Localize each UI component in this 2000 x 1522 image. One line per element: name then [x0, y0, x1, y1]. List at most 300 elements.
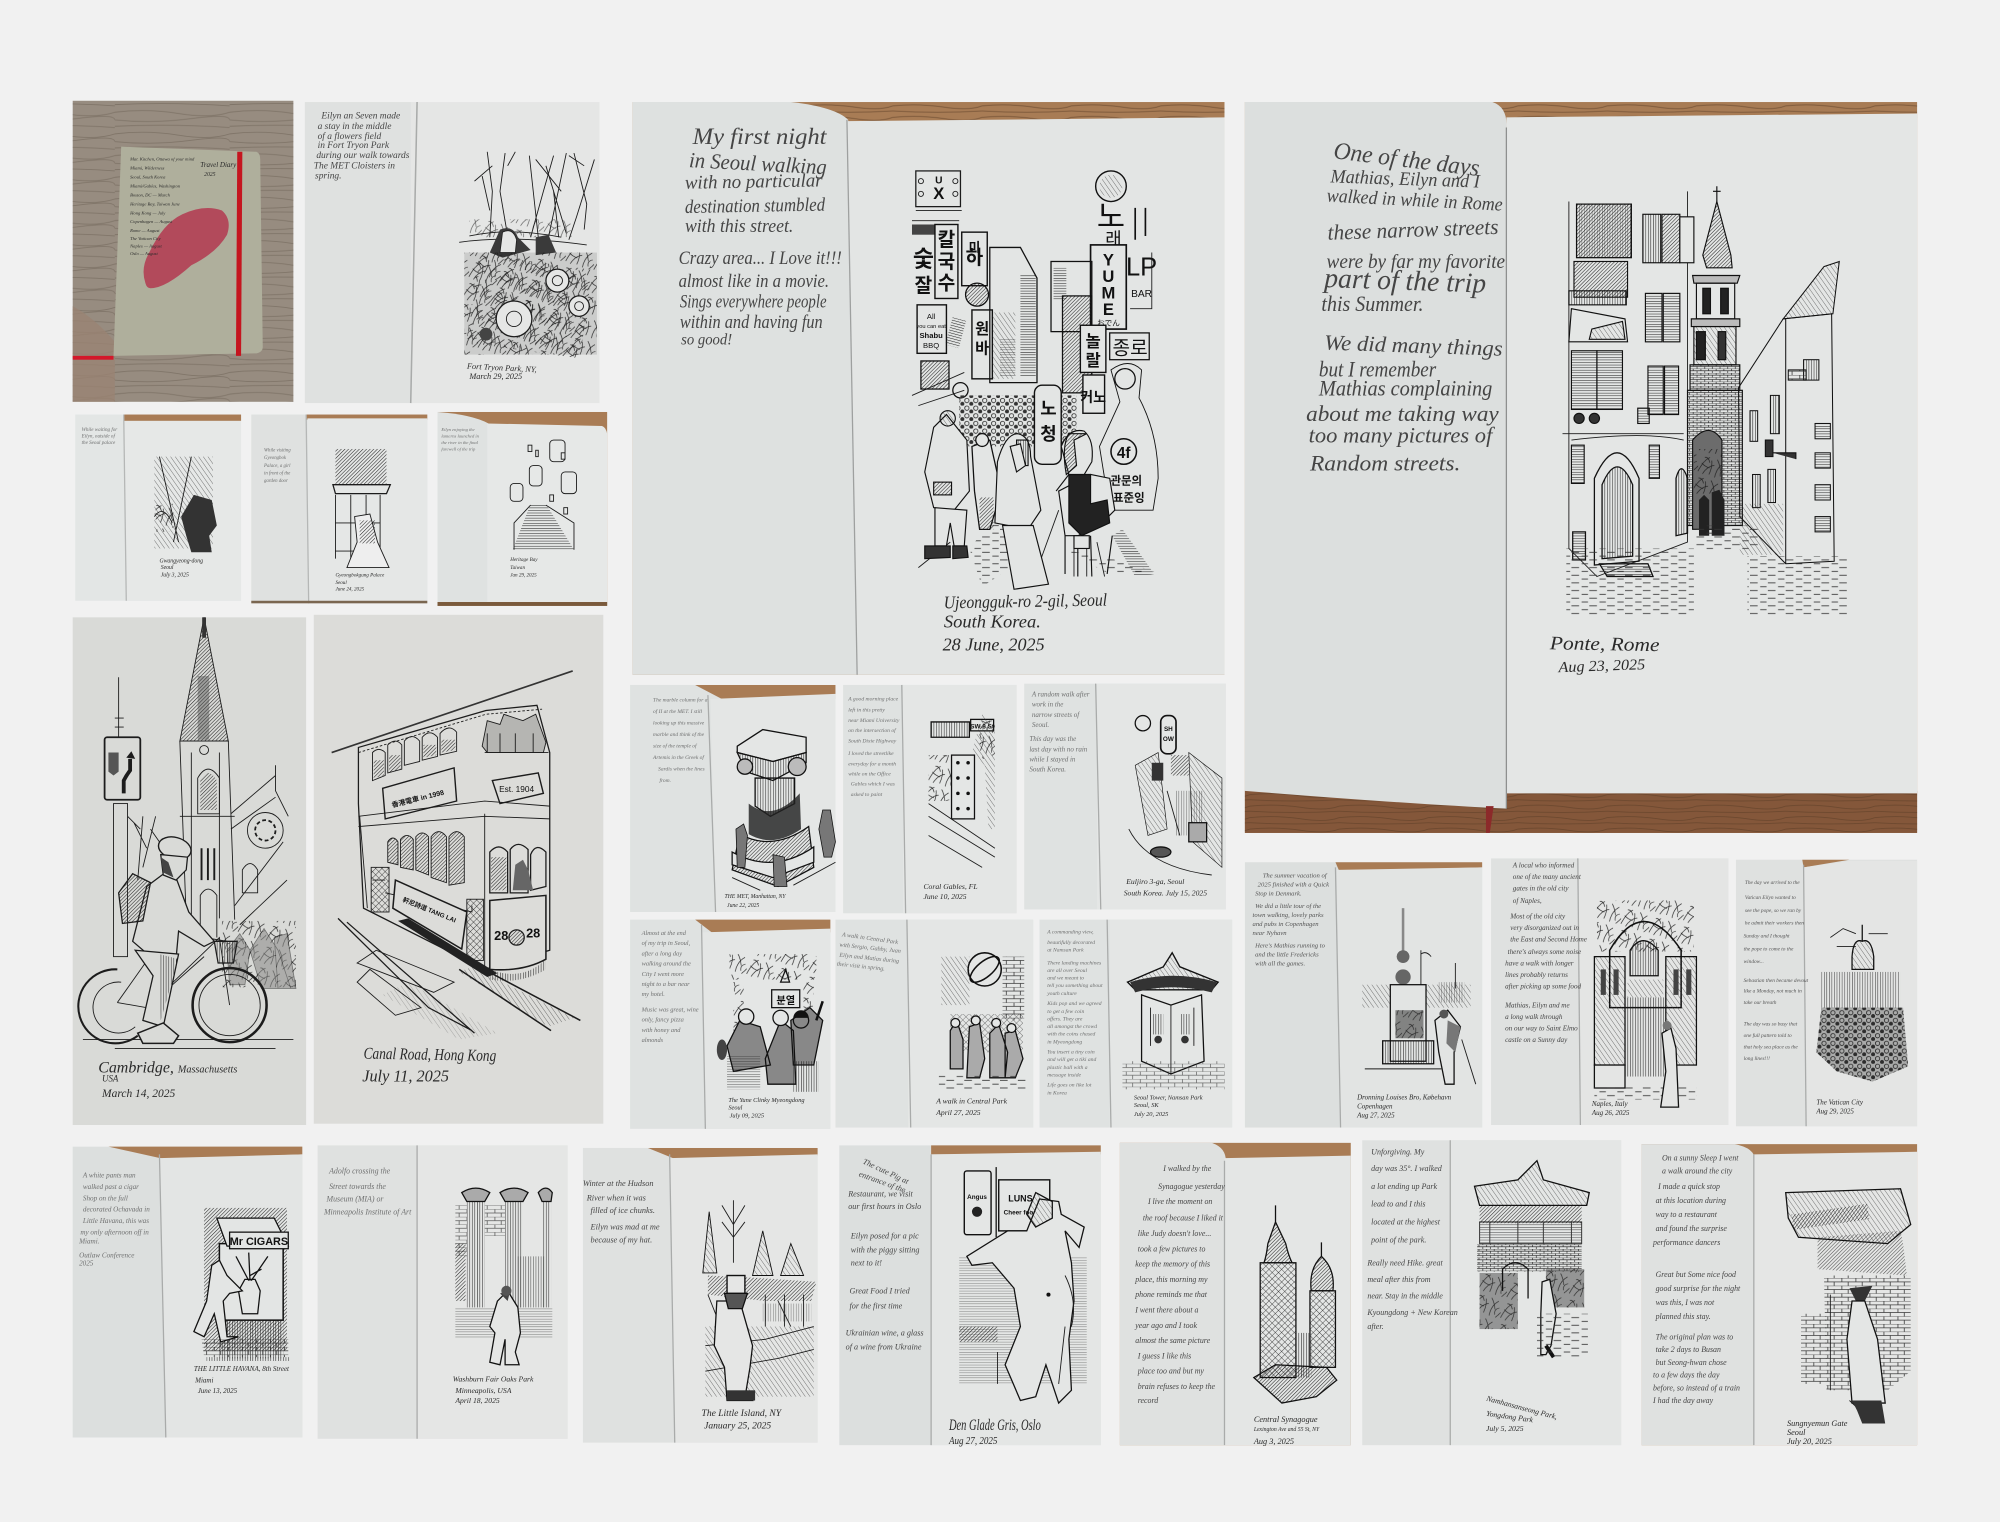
caption	[509, 557, 538, 579]
note: work in the	[1032, 701, 1063, 709]
caption: Gwangyeong-dong	[159, 558, 203, 564]
sketch: left shop signs: 원	[975, 321, 989, 338]
sketch: steps	[455, 1307, 552, 1338]
note: while I stayed in	[1029, 755, 1076, 763]
sketch: minarets	[1264, 1205, 1292, 1263]
sketch: left shop signs: 국	[938, 252, 955, 273]
panel: Coral Gables spread	[843, 685, 1017, 913]
caption: Aug 27, 2025	[948, 1436, 997, 1447]
note: town walking, lovely parks	[1253, 912, 1324, 919]
cover handwriting list: Naples — August	[129, 243, 163, 248]
sketch: UX sign tower: U	[935, 176, 942, 187]
sketch: stone wall	[1477, 1244, 1582, 1272]
note: Seoul.	[1032, 721, 1049, 729]
note: in Seoul walking	[689, 148, 827, 179]
note: South Korea.	[1029, 766, 1066, 774]
sketch: palm tree	[972, 714, 995, 829]
sketch: cyclist	[119, 833, 214, 1043]
caption	[194, 1365, 290, 1395]
sketch: soju bottle: 4f	[1117, 445, 1131, 462]
caption	[453, 1374, 534, 1405]
sketch: left shop signs: 수	[938, 273, 955, 295]
sketch: UX sign tower	[912, 171, 962, 235]
note: entrance of the	[858, 1169, 907, 1195]
sketch: upper side sign	[383, 768, 457, 819]
note: Minneapolis Institute of Art	[323, 1207, 412, 1216]
note: size of the temple of	[653, 742, 698, 749]
red elastic strap	[236, 152, 242, 356]
caption: Fort Tryon Park, NY,	[466, 362, 537, 374]
note	[652, 697, 708, 784]
sketch: lower deck arches	[388, 832, 464, 885]
note: plastic ball with a	[1046, 1065, 1088, 1071]
note: The day we arrived to the	[1745, 880, 1800, 886]
caption	[1356, 1093, 1452, 1119]
note: place, this morning my	[1134, 1275, 1208, 1284]
cover handwriting list	[129, 157, 237, 256]
note: keep the memory of this	[1135, 1260, 1210, 1269]
panel: MET Ionic column spread	[630, 685, 835, 912]
caption: The Vatican City	[1816, 1099, 1864, 1107]
sketch: bell tower	[1687, 186, 1742, 529]
note: of a flowers field	[318, 131, 381, 142]
panel: Central Synagogue spread	[1120, 1143, 1351, 1446]
note: Here's Mathias running to	[1254, 943, 1326, 950]
note: and pubs in Copenhagen	[1253, 921, 1319, 928]
note: Artemis in the Greek of	[652, 754, 705, 761]
note: gates in the old city	[1513, 884, 1569, 892]
cover handwriting list: Hong Kong — July	[129, 210, 166, 215]
note	[263, 449, 291, 484]
caption	[98, 1060, 237, 1100]
caption: A walk in Central Park	[935, 1096, 1008, 1105]
panel: Copenhagen lion monument spread	[1245, 862, 1482, 1128]
sketch: band stage	[730, 954, 816, 980]
note: Restaurant, we visit	[847, 1189, 914, 1198]
caption: March 29, 2025	[468, 372, 522, 381]
note: A white pants man	[82, 1171, 136, 1179]
note: I loved the streetlike	[847, 751, 894, 757]
note: Ukrainian wine, a glass	[846, 1328, 924, 1337]
note: these narrow streets	[1327, 215, 1499, 245]
note: at Namsan Park	[1047, 948, 1084, 954]
note: Music was great, wine	[641, 1006, 699, 1013]
note: Shop on the full	[83, 1194, 128, 1202]
note: While waiting for	[82, 426, 117, 433]
note	[847, 696, 900, 798]
sketch: soju bottle: 관문의	[1110, 474, 1142, 488]
note: and will get a tiki and	[1047, 1057, 1096, 1063]
note: Outlaw Conference	[79, 1252, 134, 1260]
sketch: crowd	[959, 395, 1077, 446]
sketch: right building and roof	[1739, 261, 1839, 564]
note: destination stumbled	[685, 195, 826, 218]
note: to a few days the day	[1653, 1371, 1720, 1380]
caption	[935, 1096, 1008, 1117]
panel: Hong Kong tram: 28	[494, 928, 508, 943]
caption	[466, 362, 537, 381]
sketch: crowd	[222, 921, 296, 987]
sketch: upper front sign	[492, 773, 543, 804]
note: almost like in a movie.	[679, 271, 829, 292]
sketch: fluted shaft and dark drum	[755, 778, 795, 816]
caption: The Yune Clinky Myeongdong	[728, 1097, 805, 1104]
note: I went there about a	[1134, 1305, 1199, 1314]
cover handwriting list: Boston, DC — March	[130, 192, 171, 198]
note: there's always some noise	[1508, 948, 1581, 956]
note: after picking up some food	[1505, 983, 1582, 991]
note: one full pattern told to	[1744, 1032, 1792, 1039]
note: take 2 days to Busan	[1656, 1345, 1721, 1354]
note: year ago and I took	[1134, 1321, 1197, 1330]
note: Street towards the	[329, 1182, 386, 1191]
sketch: awning	[217, 1218, 288, 1246]
note: farewell of the trip	[441, 446, 476, 451]
panel: Namsan park gate spread	[1362, 1140, 1621, 1445]
caption: Central Synagogue	[1254, 1415, 1318, 1424]
sketch: YUME sign: Y	[1103, 250, 1114, 269]
sketch: traffic lights and sign	[931, 722, 969, 737]
sketch: harbour buildings	[1362, 985, 1471, 1008]
sketch: right side signs	[1051, 253, 1157, 413]
sketch: alley	[1135, 753, 1222, 867]
note: A good morning place	[847, 696, 899, 702]
note: Museum (MIA) or	[326, 1195, 384, 1204]
note: There landing machines	[1047, 960, 1102, 966]
sketch: long-haired girl	[995, 434, 1048, 589]
note: My first night	[692, 124, 827, 149]
note: On a sunny Sleep I went	[1662, 1154, 1739, 1163]
note: castle on a Sunny day	[1505, 1036, 1568, 1044]
note: like a Monday, not much in	[1744, 988, 1802, 994]
sketch: bicycle	[78, 937, 293, 1048]
panel: Vatican City spread	[1736, 860, 1917, 1126]
note: Gables which I was	[851, 782, 896, 788]
note: 2025	[79, 1259, 94, 1267]
note: all amongst the crowd	[1047, 1024, 1097, 1030]
panel: Hong Kong tram: 28	[526, 925, 540, 940]
note: walked in while in Rome	[1326, 186, 1504, 216]
caption	[1124, 877, 1207, 897]
sketch: man from behind	[925, 411, 969, 559]
caption: June 22, 2025	[727, 903, 759, 909]
note: Sings everywhere people	[680, 291, 827, 312]
note: take our breath	[1744, 1000, 1777, 1006]
sketch: courtyard plant and figures	[1694, 449, 1722, 494]
note: Vatican Eilyn wanted to	[1745, 895, 1796, 901]
caption: April 18, 2025	[454, 1396, 500, 1405]
panel: Eulji-ro alley spread	[1024, 684, 1226, 909]
note: very disorganized out in	[1510, 924, 1579, 932]
note: Eilyn and Matias during	[838, 953, 899, 965]
caption	[1484, 1393, 1558, 1433]
sketch: passengers on the top deck	[482, 714, 546, 753]
sketch: gate roof	[1786, 1189, 1911, 1244]
note: River when it was	[586, 1193, 646, 1202]
caption	[1591, 1100, 1630, 1117]
caption: Aug 26, 2025	[1591, 1109, 1630, 1117]
note: see the pope, so we ran by	[1745, 908, 1802, 914]
sketch: left shop signs: 바	[975, 340, 989, 357]
caption: Aug 27, 2025	[1356, 1111, 1395, 1119]
note: our first hours in Oslo	[848, 1202, 921, 1211]
sketch: walking group	[950, 1020, 1023, 1078]
note: Most of the old city	[1509, 912, 1566, 920]
note: offers. They are	[1047, 1015, 1083, 1022]
panel: Fort Tryon Park spread	[305, 102, 599, 403]
note	[1366, 1147, 1458, 1331]
note: Eilyn was mad at me	[590, 1223, 660, 1232]
sketch: storefront	[204, 1208, 287, 1351]
panel: Eulji-ro alley spread: OW	[1163, 736, 1174, 743]
note: We did a little tour of the	[1255, 903, 1321, 910]
note: after a long day	[642, 950, 682, 957]
caption: Seoul, SK	[1134, 1102, 1159, 1109]
caption: Aug 29, 2025	[1815, 1108, 1854, 1116]
panel: Sungnyemun gate spread	[1642, 1144, 1917, 1446]
sketch: main building outline	[1569, 191, 1687, 577]
note	[1134, 1164, 1225, 1405]
caption: Seoul Tower, Namsan Park	[1134, 1094, 1203, 1101]
panel: Seoul street spread	[633, 102, 1224, 675]
note: were by far my favorite	[1327, 251, 1505, 273]
sketch: domino building	[952, 755, 974, 819]
note: walking around the	[642, 961, 691, 968]
caption: Den Glade Gris, Oslo	[948, 1417, 1041, 1434]
note: too many pictures of	[1309, 424, 1495, 448]
caption: Copenhagen	[1357, 1102, 1393, 1110]
note: Sunday and I thought	[1744, 933, 1790, 939]
note: one of the many ancient	[1513, 873, 1582, 881]
note: about me taking way	[1306, 402, 1499, 426]
caption: Aug 3, 2025	[1253, 1437, 1294, 1446]
sketch: window vase and plant	[239, 1279, 260, 1314]
note: within and having fun	[680, 312, 823, 333]
sketch: tracks and road	[338, 918, 580, 1033]
caption	[923, 882, 978, 901]
note: I guess I like this	[1137, 1351, 1191, 1360]
sketch: pedestrian	[1661, 1028, 1679, 1107]
sketch: columns	[467, 1199, 485, 1307]
sketch: cobbled street	[1566, 548, 1694, 615]
note: in Fort Tryon Park	[318, 141, 390, 151]
caption	[159, 558, 203, 579]
note: Eilyn posed for a pic	[850, 1232, 919, 1241]
sketch: right side signs: BAR	[1131, 289, 1152, 300]
panel: Den Glade Gris Oslo spread: LUNS	[1008, 1194, 1033, 1204]
sketch: right side signs: 랄	[1085, 351, 1101, 370]
note: the river in the final	[441, 440, 479, 445]
note: South Dixie Highway	[848, 738, 897, 744]
note: performance dancers	[1652, 1238, 1720, 1247]
sketch: pavement	[969, 510, 1154, 587]
note: on our way to Saint Elmo	[1505, 1025, 1578, 1033]
cover handwriting list: Travel Diary	[200, 161, 237, 169]
note: before, so instead of a train	[1653, 1383, 1740, 1392]
note: night to a bar near	[642, 981, 690, 988]
note: on the intersection of	[848, 727, 897, 734]
caption: South Korea.	[944, 612, 1041, 632]
sketch: centre building	[990, 247, 1037, 383]
caption: Gyeongbokgung Palace	[335, 573, 385, 579]
caption: June 24, 2025	[335, 587, 365, 593]
note: Eilyn enjoying the	[440, 427, 475, 432]
note	[1029, 690, 1090, 774]
sketch: daffodil bed	[464, 253, 597, 355]
caption: The Little Island, NY	[702, 1408, 783, 1419]
note: with Sergio, Gabby, Juan	[839, 942, 901, 955]
note	[1652, 1154, 1741, 1405]
note: meal after this from	[1367, 1275, 1431, 1284]
note: from.	[659, 777, 671, 784]
cover handwriting list: Oslo — August	[130, 251, 158, 256]
sketch: overhead wire	[332, 671, 573, 753]
note: The summer vacation of	[1263, 873, 1328, 880]
sketch: left shop signs: 칼	[938, 229, 956, 251]
caption: Sungnyemun Gate	[1787, 1419, 1848, 1428]
caption: April 27, 2025	[935, 1108, 981, 1117]
note: this Summer.	[1321, 292, 1423, 316]
sketch: 노청 sign: 청	[1040, 424, 1057, 444]
caption: July 11, 2025	[362, 1067, 449, 1086]
sketch: left shop signs	[912, 224, 992, 406]
sketch: upper windows with shutters	[1569, 204, 1694, 483]
note	[440, 427, 480, 451]
panel: Seoul tower kiosk spread	[1040, 920, 1232, 1128]
note: with the coins chased	[1047, 1032, 1096, 1038]
sketch: trees	[459, 152, 594, 245]
note: with no particular	[685, 170, 823, 194]
note	[641, 930, 699, 1044]
caption: Cambridge, Massachusetts	[98, 1060, 237, 1077]
sketch: guard with hat and spear	[1849, 1286, 1872, 1301]
note: Little Havana, this was	[82, 1217, 149, 1225]
caption: March 14, 2025	[101, 1088, 175, 1100]
caption: Canal Road, Hong Kong	[363, 1044, 496, 1065]
note: during our walk towards	[316, 151, 410, 161]
note: with honey and	[642, 1027, 681, 1034]
note	[583, 1179, 660, 1244]
caption	[362, 1044, 496, 1086]
note: near Miami University	[848, 718, 900, 724]
cover handwriting list: 2025	[204, 172, 216, 178]
note: Almost at the end	[641, 930, 687, 937]
note: of Naples,	[1513, 897, 1542, 905]
sketch: lanterns	[510, 440, 577, 514]
panel: Central Park walk spread	[835, 920, 1033, 1128]
sketch: neon music bar sign	[1096, 171, 1145, 249]
panel: Naples gate spread	[1491, 858, 1728, 1125]
panel: Hong Kong tram: Est. 1904	[499, 784, 534, 794]
sketch: church spire	[180, 617, 228, 741]
caption: Jan 29, 2025	[510, 573, 537, 579]
note: Sardis when the lines	[658, 766, 705, 772]
note	[78, 1171, 150, 1267]
note: Really need Hike. great	[1366, 1258, 1443, 1267]
note: to get a few coin	[1047, 1008, 1084, 1015]
note: he admit their workers then	[1745, 921, 1804, 927]
sketch: soju bottle	[1099, 364, 1158, 510]
panel: Heritage Bay lanterns spread	[438, 412, 607, 606]
sketch: woman with crossed arms	[1056, 430, 1115, 577]
sketch: right side signs: 커노	[1080, 389, 1106, 405]
caption: Dronning Louises Bro, Købehavn	[1356, 1093, 1452, 1101]
caption: Seoul	[161, 565, 174, 571]
panel: Yeon Clinic band spread: 분열	[776, 994, 795, 1007]
sketch: soju bottle: 표준잉	[1113, 491, 1145, 504]
caption: June 10, 2025	[923, 892, 967, 901]
note	[81, 426, 117, 446]
caption: January 25, 2025	[704, 1421, 771, 1432]
note: day was 35°. I walked	[1371, 1164, 1443, 1173]
cover handwriting list: Heritage Bay, Taiwan June	[129, 201, 180, 207]
sketch: tram roof and upper deck	[358, 705, 550, 969]
note	[314, 112, 410, 182]
cover handwriting list: Seoul, South Korea	[130, 175, 166, 181]
caption: Namhansanseong Park,	[1484, 1393, 1558, 1421]
note: are all over Seoul	[1047, 968, 1087, 974]
caption: Washburn Fair Oaks Park	[453, 1374, 534, 1383]
note: The original plan was to	[1656, 1332, 1733, 1341]
note: but I remember	[1319, 357, 1437, 381]
note: after.	[1367, 1322, 1384, 1331]
note: of a wine from Ukraine	[846, 1342, 922, 1351]
sketch: left shop signs: you can eat	[916, 324, 946, 330]
note: the roof because I liked it	[1143, 1214, 1224, 1223]
note: Eilyn an Seven made	[320, 112, 400, 122]
note: in front of the	[264, 471, 291, 476]
sketch: left shop signs: 숯	[913, 246, 934, 272]
sketch: man with coat	[1435, 1010, 1460, 1084]
note: While visiting	[264, 449, 291, 454]
sketch: path	[1537, 1314, 1588, 1358]
note: garden door	[264, 479, 288, 484]
sketch: tram underside	[398, 918, 497, 977]
note: next to it!	[851, 1258, 882, 1267]
panel: Den Glade Gris Oslo spread	[839, 1145, 1101, 1447]
note: my hotel.	[642, 991, 665, 998]
caption	[948, 1417, 1041, 1447]
caption	[335, 573, 385, 593]
panel: palace hanbok spread	[251, 415, 427, 603]
note: located at the highest	[1371, 1217, 1441, 1226]
note	[323, 1166, 412, 1216]
note: Stop in Denmark.	[1255, 890, 1302, 897]
note: brain refuses to keep the	[1138, 1382, 1216, 1391]
caption: South Korea. July 15, 2025	[1124, 888, 1207, 897]
note: part of the trip	[1322, 263, 1487, 300]
red ribbon	[73, 356, 114, 360]
caption: June 13, 2025	[198, 1387, 238, 1395]
sketch: left shop signs: BBQ	[923, 341, 939, 350]
note: 2025 finished with a Quick	[1258, 881, 1330, 888]
note: Life goes on like lot	[1046, 1082, 1092, 1089]
note: The marble column for a	[653, 697, 708, 704]
sketch: brick pavement	[202, 1339, 288, 1357]
sketch: 노청 sign	[1034, 385, 1061, 464]
note: phone reminds me that	[1134, 1290, 1208, 1299]
sketch: SHOW sign	[1161, 716, 1176, 754]
note	[679, 124, 842, 348]
note: Synagogue yesterday	[1158, 1182, 1225, 1191]
note: with all the games.	[1255, 961, 1305, 968]
sketch: bare branches	[128, 816, 159, 880]
note: while on the Office	[848, 771, 891, 778]
sketch: paving	[1122, 1061, 1224, 1089]
caption: Seoul	[1787, 1428, 1806, 1437]
panel: Coral Gables spread: SW 8 St	[970, 723, 995, 730]
note	[1306, 137, 1505, 476]
